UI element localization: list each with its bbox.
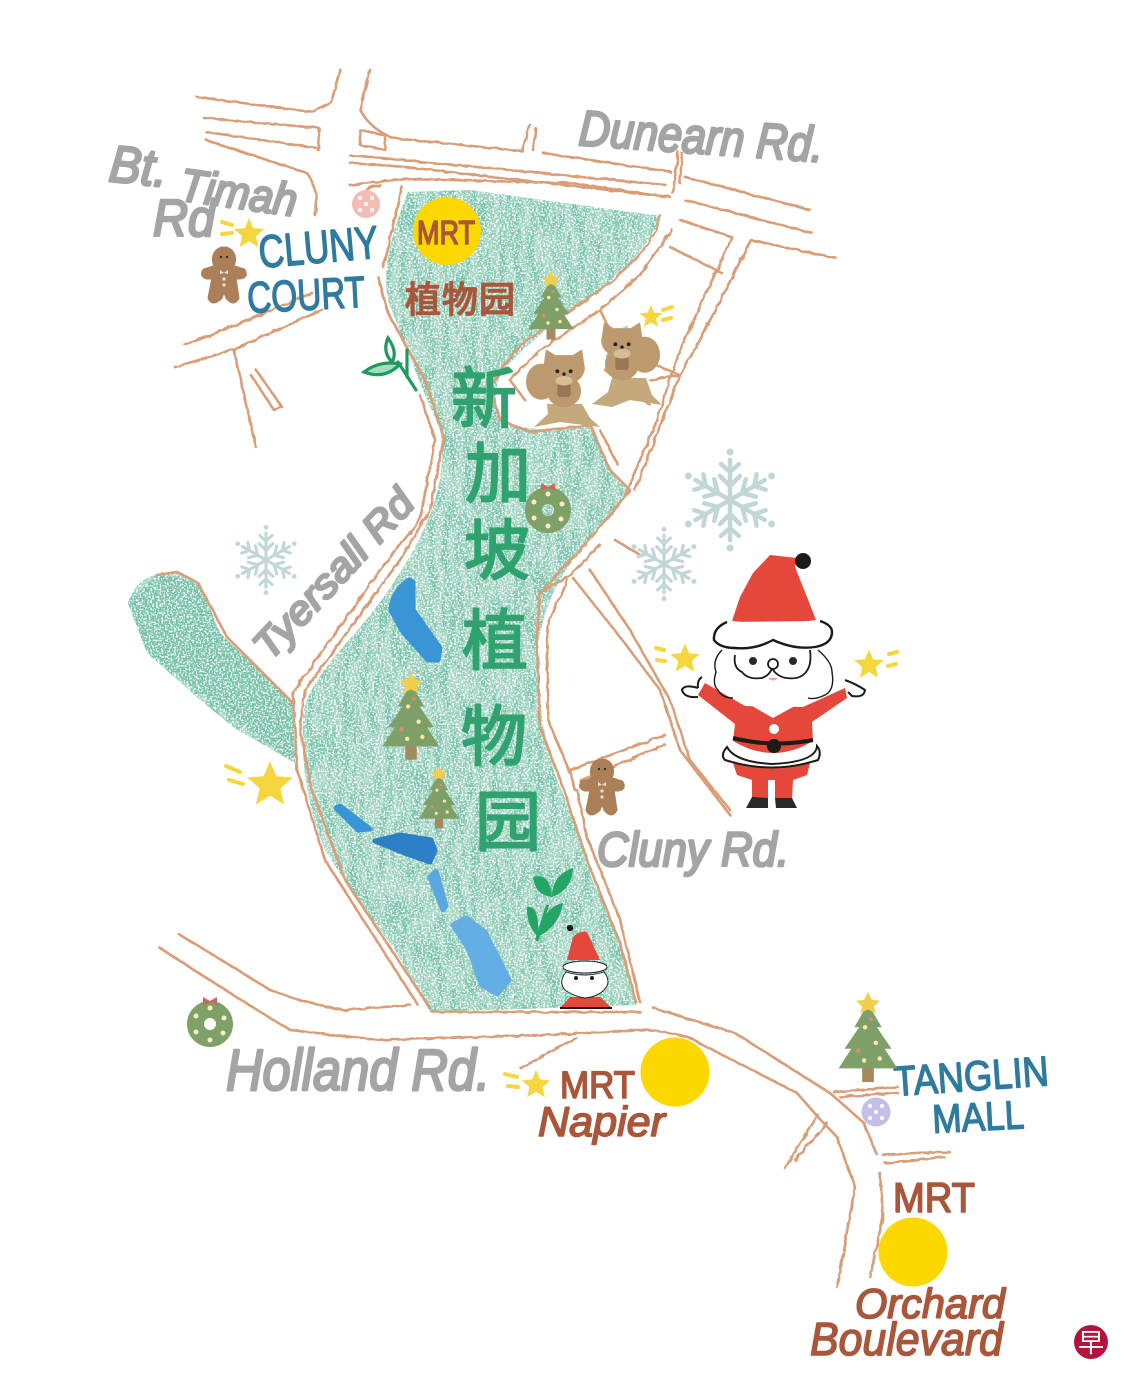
icon: squirrels on stumps	[526, 322, 662, 427]
icon: polka dot baubles	[352, 190, 890, 1126]
icon: gingerbread men	[203, 248, 623, 814]
MRT station: Napier	[538, 1038, 710, 1145]
logo: Zaobao seal	[1074, 1325, 1108, 1359]
label: Tanglin Mall: TANGLIN	[892, 1047, 1050, 1105]
icon: snowflakes	[232, 448, 780, 601]
road label: Cluny Rd.: Cluny Rd.	[597, 824, 789, 877]
icon: leaf sprigs	[364, 338, 573, 942]
label: Tanglin Mall: MALL	[931, 1093, 1025, 1142]
MRT station: Botanic Gardens: MRT	[417, 214, 475, 251]
icon: wreaths	[194, 483, 564, 1042]
road label: Tyersall Rd: Tyersall Rd	[244, 480, 425, 668]
MRT station: Orchard Boulevard: MRT	[893, 1174, 975, 1221]
icon: small Santa Claus in park	[560, 925, 612, 1008]
road label: Bt. Timah Rd	[107, 135, 301, 248]
MRT station: Orchard Boulevard: Boulevard	[810, 1313, 1004, 1365]
water: ponds and stream	[336, 580, 509, 994]
park: Singapore Botanic Gardens green area	[120, 180, 680, 1020]
label: Cluny Court: CLUNY	[256, 216, 380, 278]
title: vertical Chinese park name: 植	[462, 604, 528, 678]
MRT station: Orchard Boulevard: Orchard	[855, 1280, 1007, 1327]
label: Tanglin Mall	[892, 1047, 1050, 1142]
title: vertical Chinese park name	[451, 362, 541, 859]
stars beside Santa	[656, 643, 897, 678]
MRT station: Napier: Napier	[538, 1098, 667, 1145]
MRT station: Botanic Gardens	[405, 197, 515, 320]
icon: Christmas trees	[382, 270, 897, 1082]
title: vertical Chinese park name: 园	[475, 785, 541, 859]
roads: hand-drawn crayon network	[157, 70, 950, 1287]
MRT station: Orchard Boulevard	[810, 1174, 1007, 1365]
road label: Bt. Timah Rd: Timah	[177, 158, 301, 226]
road label: Bt. Timah Rd: Bt.	[107, 135, 170, 199]
road label: Dunearn Rd.: Dunearn Rd.	[577, 100, 826, 173]
road label: Holland Rd.: Holland Rd.	[226, 1038, 490, 1103]
title: vertical Chinese park name: 加	[465, 437, 531, 511]
icon: large Santa Claus	[656, 553, 897, 808]
label: Cluny Court: COURT	[246, 268, 366, 323]
title: vertical Chinese park name: 物	[461, 700, 527, 774]
label: Cluny Court	[246, 216, 380, 323]
title: vertical Chinese park name: 坡	[464, 514, 530, 588]
title: vertical Chinese park name: 新	[451, 362, 517, 436]
MRT station: Botanic Gardens: 植物园	[405, 279, 515, 320]
road label: Bt. Timah Rd: Rd	[153, 190, 217, 248]
icon: stars	[222, 218, 672, 1097]
MRT station: Napier: MRT	[560, 1065, 635, 1107]
logo: Zaobao seal: 早	[1078, 1328, 1104, 1358]
